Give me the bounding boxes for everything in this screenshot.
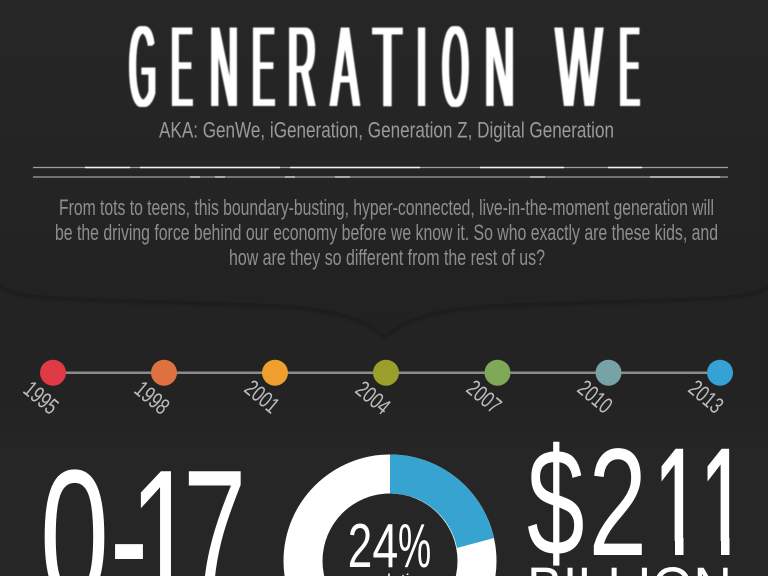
donut percentage [348, 512, 431, 576]
year labels [19, 375, 729, 419]
spending figure [527, 417, 750, 576]
2013 marker [707, 360, 733, 386]
timeline [19, 360, 733, 419]
year labels: 2004 [351, 376, 396, 419]
intro text [55, 195, 718, 270]
title: O [442, 1, 468, 132]
blue 24% segment [390, 454, 494, 548]
infographic canvas: E [620, 1, 639, 132]
2010 marker [596, 360, 622, 386]
year labels: 1998 [130, 376, 175, 419]
title: N [210, 1, 238, 132]
year labels: 1995 [19, 376, 64, 419]
donut chart [284, 454, 496, 576]
age range figure [40, 431, 246, 576]
title: A [331, 1, 359, 132]
title: T [373, 1, 402, 132]
year labels: 2001 [240, 375, 285, 418]
year labels: 2010 [573, 375, 618, 418]
title: G [129, 1, 156, 132]
title: E [252, 1, 274, 132]
2007 marker [484, 360, 510, 386]
panel: speech bubble [0, 0, 768, 335]
year labels: 2013 [684, 375, 729, 418]
1995 marker [40, 360, 66, 386]
2001 marker [262, 360, 288, 386]
title: I [417, 1, 426, 132]
title: W [556, 1, 602, 132]
subtitle: AKA: GenWe, iGeneration, Generation Z, Digital Generation [159, 118, 614, 142]
1998 marker [151, 360, 177, 386]
title: N [485, 1, 514, 132]
panel: speech bubble shadow [0, 285, 768, 337]
title [129, 1, 639, 132]
title: R [288, 1, 316, 132]
intro text: how are they so different from the rest of us? [229, 245, 545, 270]
2004 marker [373, 360, 399, 386]
title: E [171, 1, 192, 132]
year labels: 2007 [462, 375, 507, 418]
